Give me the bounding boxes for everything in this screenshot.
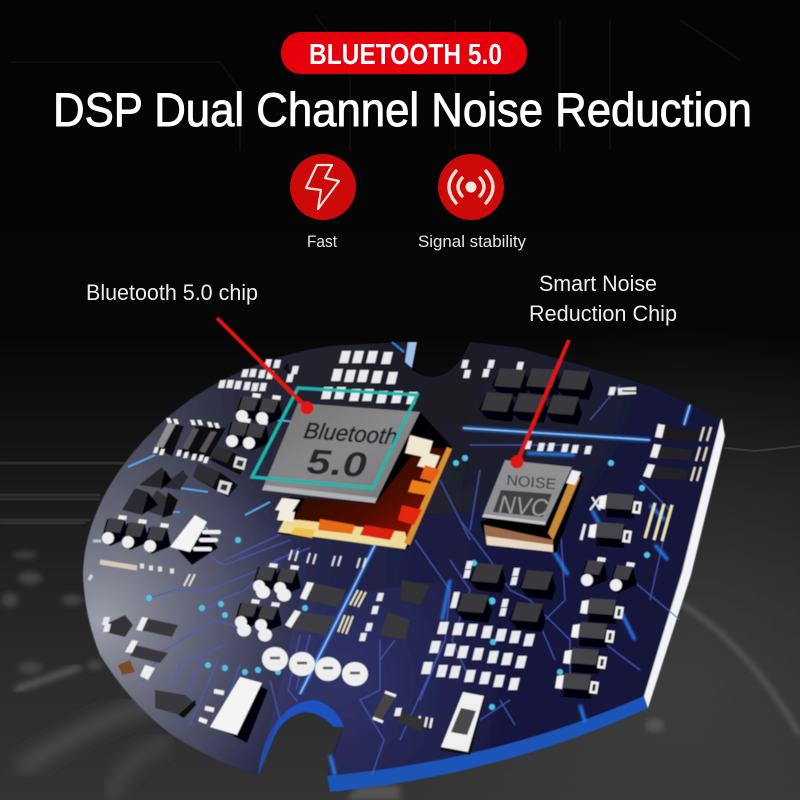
- component group: left ICs: [93, 393, 283, 565]
- callout: smart noise reduction chip: Reduction Chip: [529, 301, 677, 326]
- component group: right edge transistors: [581, 424, 711, 548]
- component: Noise reduction chip: [480, 460, 583, 553]
- arrow: noise chip pointer: [510, 340, 569, 468]
- arrow: Bluetooth chip pointer: [217, 318, 314, 414]
- teal frame around Bluetooth chip: [252, 388, 417, 488]
- badge: Bluetooth 5.0: BLUETOOTH 5.0: [309, 39, 502, 71]
- component group: small pads top left: [89, 359, 299, 586]
- chip label: NOISE: NOISE: [506, 472, 557, 493]
- component: gold red sub-board under Bluetooth chip: [275, 412, 452, 568]
- component group: lower squares: [450, 561, 556, 632]
- component group: lower left parts: [102, 563, 430, 743]
- caption: Signal stability: Signal stability: [418, 233, 527, 251]
- component: Bluetooth 5.0 chip: [262, 403, 420, 503]
- component group: resistor pad grid: [418, 622, 535, 755]
- panel: circuit board: [83, 318, 725, 792]
- board edge: blue and white side: [258, 418, 725, 792]
- via dots: [146, 455, 650, 710]
- circuit traces: [142, 385, 680, 775]
- bright traces: [300, 405, 690, 775]
- icon: fast lightning: [290, 154, 356, 220]
- chip label: 5.0: 5.0: [305, 442, 369, 485]
- title: DSP Dual Channel Noise Reduction: [53, 83, 752, 136]
- chip label: Bluetooth: Bluetooth: [302, 418, 400, 450]
- icon: signal: [438, 154, 504, 220]
- callout: smart noise reduction chip: Smart Noise: [539, 271, 657, 296]
- component group: top centre pads: [321, 351, 524, 425]
- callout: Bluetooth 5.0 chip: Bluetooth 5.0 chip: [86, 280, 258, 305]
- callout: smart noise reduction chip: [529, 271, 677, 326]
- caption: Fast: Fast: [307, 233, 337, 251]
- badge: Bluetooth 5.0: [281, 32, 527, 74]
- board surface: [83, 342, 721, 776]
- component group: top right squares: [479, 368, 636, 454]
- component group: inductors column: [555, 557, 637, 699]
- chip label: NVC: NVC: [495, 491, 552, 522]
